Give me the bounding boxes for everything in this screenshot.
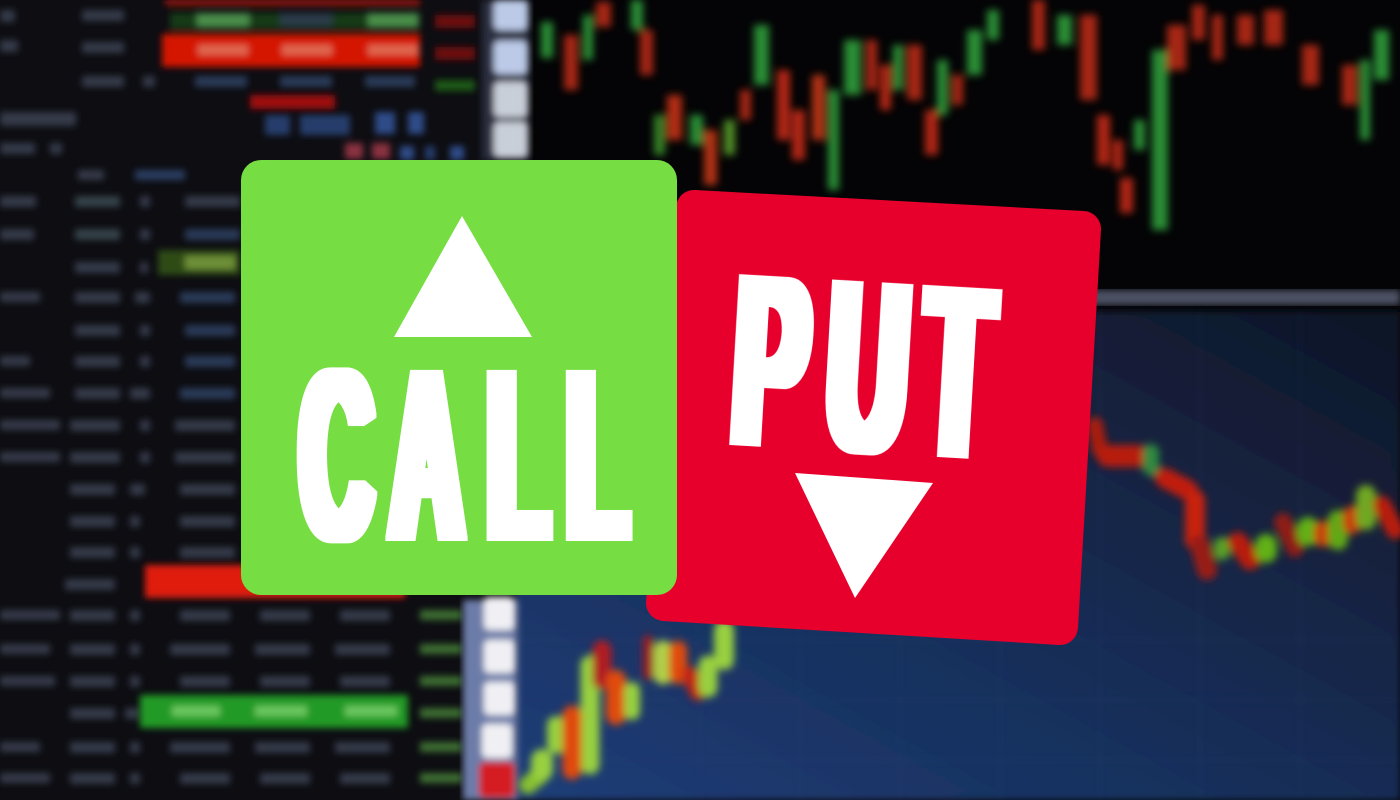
icon: down arrow [795,473,933,598]
panel: upper chart background [528,0,1400,288]
panel: lower chart background [515,312,1400,800]
table highlights [140,0,420,728]
toolbar buttons [463,0,530,800]
panel: call card [241,160,677,595]
icon: up arrow [394,216,532,337]
table rows [0,10,475,784]
divider bar between charts [1090,290,1400,305]
lower chart grid [515,310,1400,800]
put card background [664,208,1083,627]
panel: order table background [0,0,490,800]
candlesticks: upper chart [541,0,1389,230]
heading: CALL: CALL [301,320,628,591]
heading: PUT: PUT [727,224,999,510]
candlesticks: lower chart [528,425,1395,785]
call card background [241,160,677,595]
panel: put card [664,208,1083,627]
